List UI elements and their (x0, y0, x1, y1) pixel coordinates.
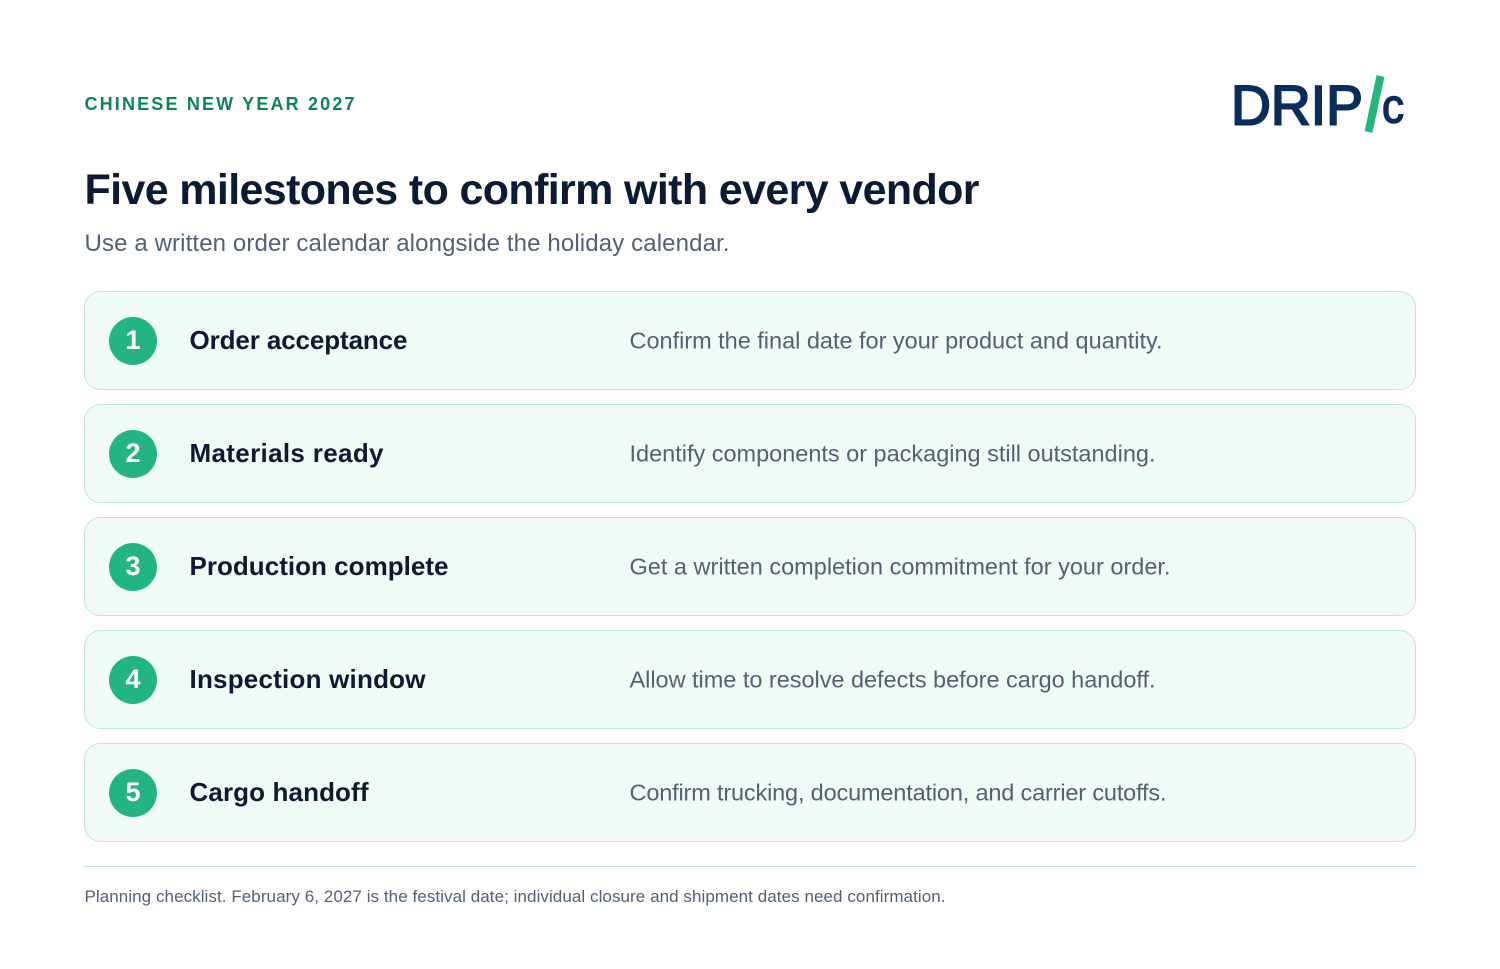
panel: milestone 2: 2 (125, 438, 141, 468)
panel: milestone 3 (84, 518, 1416, 616)
panel: milestone 4 (84, 630, 1416, 728)
subtitle: Use a written order calendar alongside the holiday calendar. (84, 230, 730, 257)
panel: milestone 2 (84, 404, 1416, 502)
eyebrow: CHINESE NEW YEAR 2027 (84, 94, 354, 114)
panel: milestone 4: Inspection window (190, 664, 426, 694)
logo: c (1382, 80, 1404, 134)
panel: milestone 5 (84, 744, 1416, 842)
panel: milestone 5: Cargo handoff (190, 777, 369, 807)
panel: milestone 4: Allow time to resolve defects before cargo handoff. (630, 666, 1156, 692)
panel: milestone 1 (84, 292, 1416, 390)
panel: milestone 5: Confirm trucking, documentation, and carrier cutoffs. (630, 780, 1166, 806)
footnote: Planning checklist. February 6, 2027 is the festival date; individual closure and shipment dates need confirmation. (84, 887, 946, 906)
panel: milestone 1: Confirm the final date for your product and quantity. (630, 328, 1162, 354)
panel: milestone 1: 1 (125, 325, 141, 355)
panel: milestone 1: Order acceptance (190, 325, 408, 355)
panel: milestone 3: 3 (125, 551, 141, 581)
logo: DRIP (1231, 74, 1363, 136)
panel: milestone 3: Production complete (190, 551, 448, 581)
panel: milestone 4: 4 (125, 664, 141, 694)
title: Five milestones to confirm with every vendor (84, 166, 980, 214)
panel: milestone 3: Get a written completion commitment for your order. (630, 554, 1170, 580)
panel: milestone 2: Materials ready (190, 438, 384, 468)
panel: milestone 2: Identify components or packaging still outstanding. (630, 440, 1156, 466)
panel: milestone 5: 5 (125, 777, 141, 807)
